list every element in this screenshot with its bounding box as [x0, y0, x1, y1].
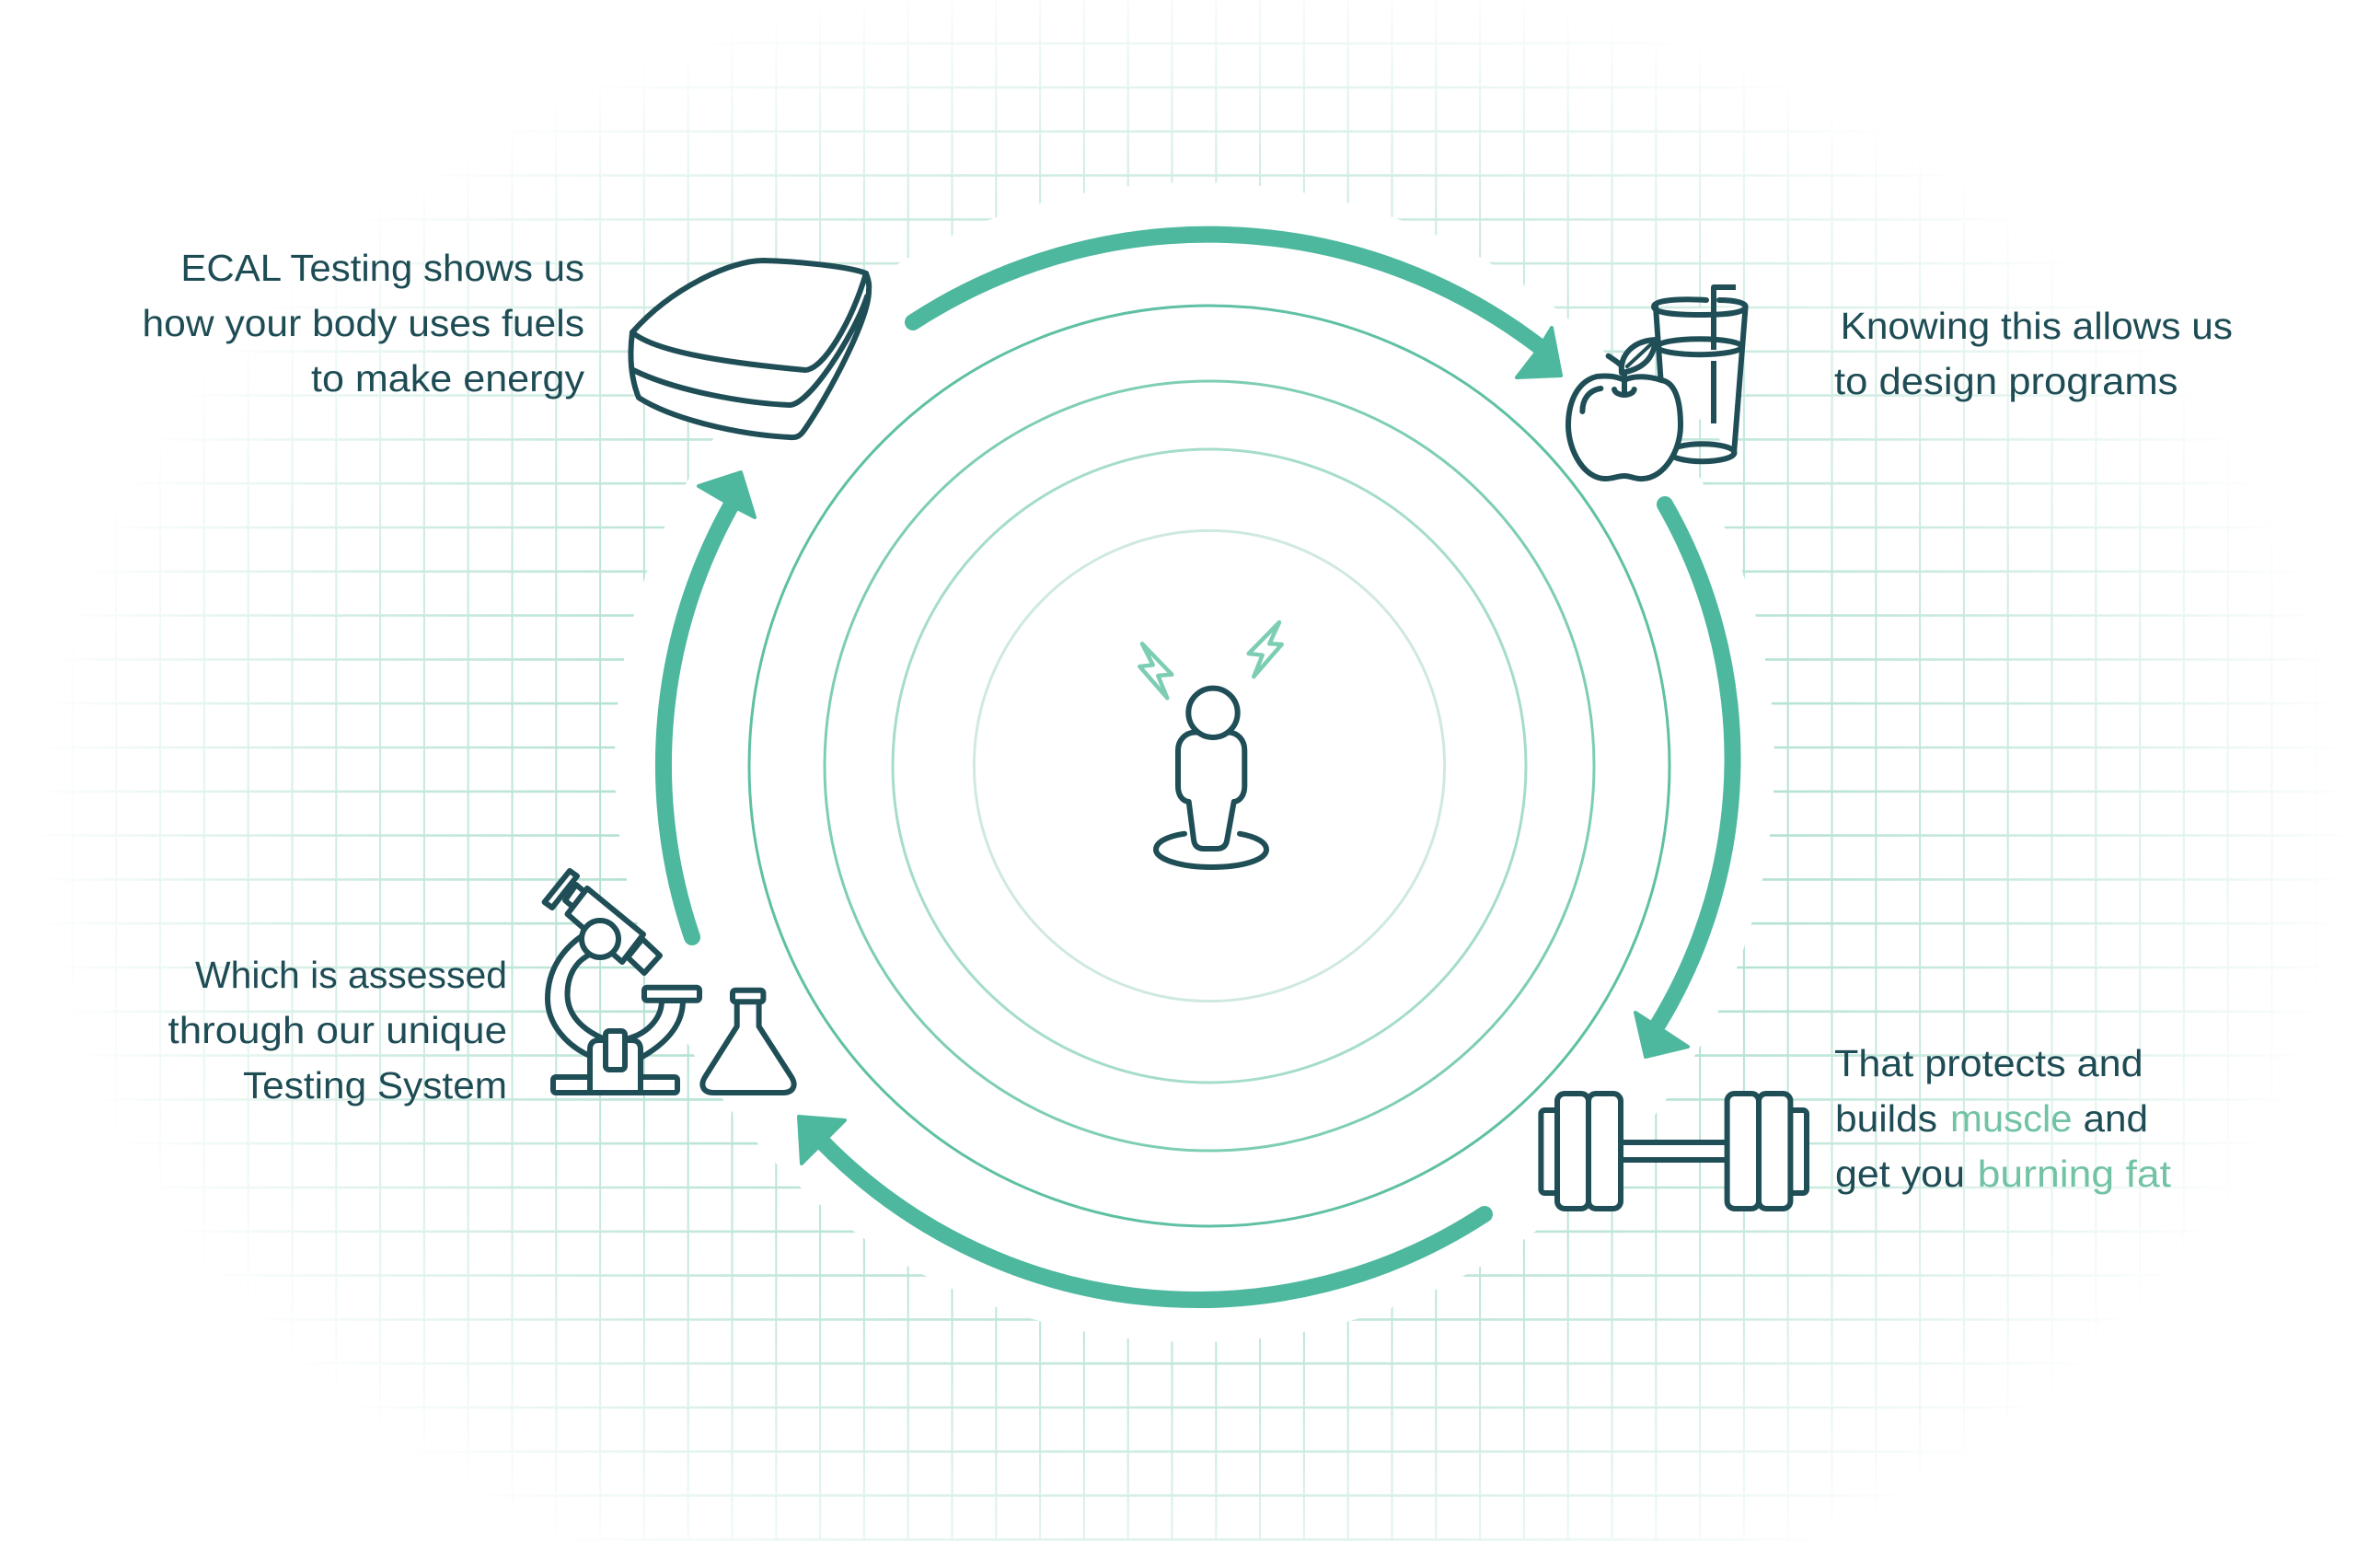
text: muscle and fat: builds [1835, 1097, 1937, 1140]
text: testing system: Testing System [243, 1064, 507, 1107]
head [1188, 689, 1238, 737]
apple [1568, 376, 1681, 479]
tube [567, 888, 643, 962]
icon: right bolt [1249, 622, 1282, 677]
arrow: left arc to sensor icon [664, 472, 755, 937]
ground ring [1156, 834, 1266, 867]
text: muscle and fat: burning fat [1978, 1153, 2171, 1195]
text: testing system: Which is assessed [195, 954, 507, 996]
concentric rings [749, 306, 1669, 1226]
icon: person with energy bolts [1139, 622, 1282, 867]
text: design programs: Knowing this allows us [1841, 305, 2233, 347]
eyepiece [565, 885, 589, 911]
text: muscle and fat: and [2084, 1097, 2148, 1140]
glass [1656, 307, 1746, 454]
body [1178, 733, 1244, 849]
text: design programs: to design programs [1834, 360, 2178, 402]
text: muscle and fat: muscle [1950, 1097, 2073, 1140]
straw [1714, 287, 1736, 423]
text: ECAL testing: how your body uses fuels [142, 302, 584, 344]
icon: microscope [545, 871, 699, 1093]
arrow: right arc to dumbbell icon [1635, 504, 1733, 1057]
arch [548, 933, 683, 1057]
text: muscle and fat: That protects and [1834, 1042, 2143, 1084]
text: muscle and fat: get you [1835, 1153, 1965, 1195]
arrow: bottom arc to microscope icon [799, 1117, 1485, 1300]
icon: dumbbell [1541, 1094, 1807, 1209]
text: testing system [168, 954, 507, 1107]
knob [582, 921, 618, 957]
base [553, 1077, 677, 1093]
text: design programs [1834, 305, 2233, 402]
leaf [1622, 340, 1656, 373]
stage [644, 988, 699, 1001]
text: testing system: through our unique [168, 1009, 507, 1051]
icon: flask [702, 991, 794, 1093]
text: ECAL testing: to make energy [311, 357, 585, 400]
text: ECAL testing [142, 247, 585, 400]
text: muscle and fat [1834, 1042, 2171, 1195]
arrow: top arc to food icon [913, 235, 1561, 377]
icon: left bolt [1139, 643, 1172, 698]
text: ECAL testing: ECAL Testing shows us [180, 247, 584, 289]
objective [628, 939, 660, 973]
icon: glass and apple [1568, 287, 1746, 479]
icon: stacked sensor device [630, 261, 869, 437]
